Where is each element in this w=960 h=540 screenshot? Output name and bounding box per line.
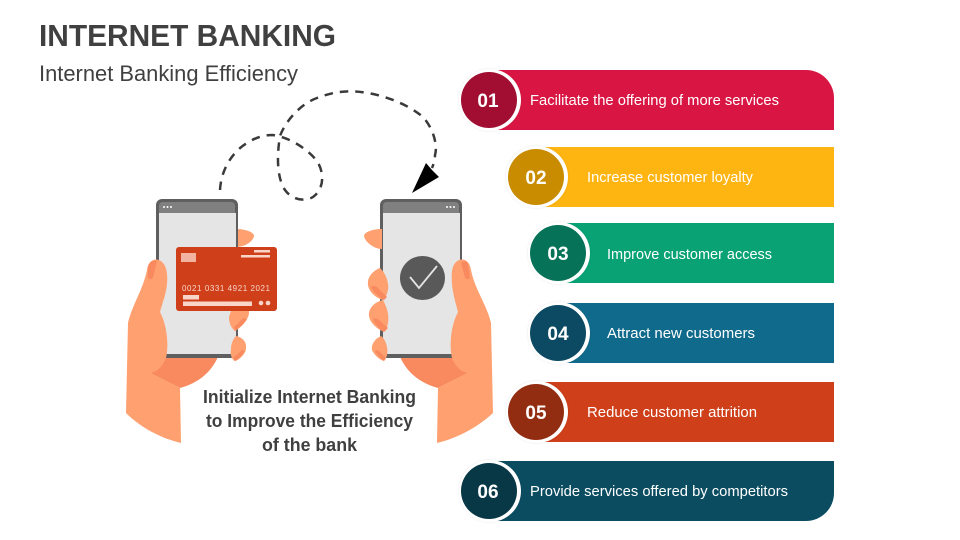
item 06 <box>459 460 834 522</box>
item 03: 03 <box>547 244 569 265</box>
phone <box>380 199 462 358</box>
item 03: Improve customer access <box>607 246 772 263</box>
item 05: Reduce customer attrition <box>587 404 757 421</box>
check mark icon <box>400 256 445 300</box>
right hand holding phone <box>364 199 493 443</box>
item 01 <box>459 69 834 131</box>
subtitle: Internet Banking Efficiency <box>39 61 298 86</box>
palm shadow <box>400 352 468 388</box>
item 02: 02 <box>525 168 547 189</box>
left hand holding phone <box>126 199 277 443</box>
item 03 <box>528 222 834 284</box>
central caption <box>203 387 416 455</box>
phone <box>156 199 238 358</box>
palm shadow <box>150 352 218 388</box>
item 04: Attract new customers <box>607 325 755 342</box>
lower fingers <box>229 311 249 331</box>
item 05: 05 <box>525 403 547 424</box>
central caption: Initialize Internet Banking <box>203 387 416 407</box>
item 06: 06 <box>477 482 499 503</box>
hand and thumb <box>437 259 493 443</box>
fingers <box>364 229 382 249</box>
item 02 <box>506 146 834 208</box>
central caption: of the bank <box>262 435 358 455</box>
item 04 <box>528 302 834 364</box>
hand and thumb <box>126 259 181 443</box>
central caption: to Improve the Efficiency <box>206 411 413 431</box>
title: INTERNET BANKING <box>39 18 336 53</box>
back finger <box>236 229 254 247</box>
credit card <box>176 247 277 311</box>
item 04: 04 <box>547 324 569 345</box>
item 06: Provide services offered by competitors <box>530 483 788 500</box>
item 05 <box>506 381 834 443</box>
credit card: 0021 0331 4921 2021 <box>182 284 271 293</box>
item 02: Increase customer loyalty <box>587 169 753 186</box>
dashed arrow path between phones <box>220 91 439 200</box>
item 01: Facilitate the offering of more services <box>530 92 779 109</box>
item 01: 01 <box>477 91 499 112</box>
